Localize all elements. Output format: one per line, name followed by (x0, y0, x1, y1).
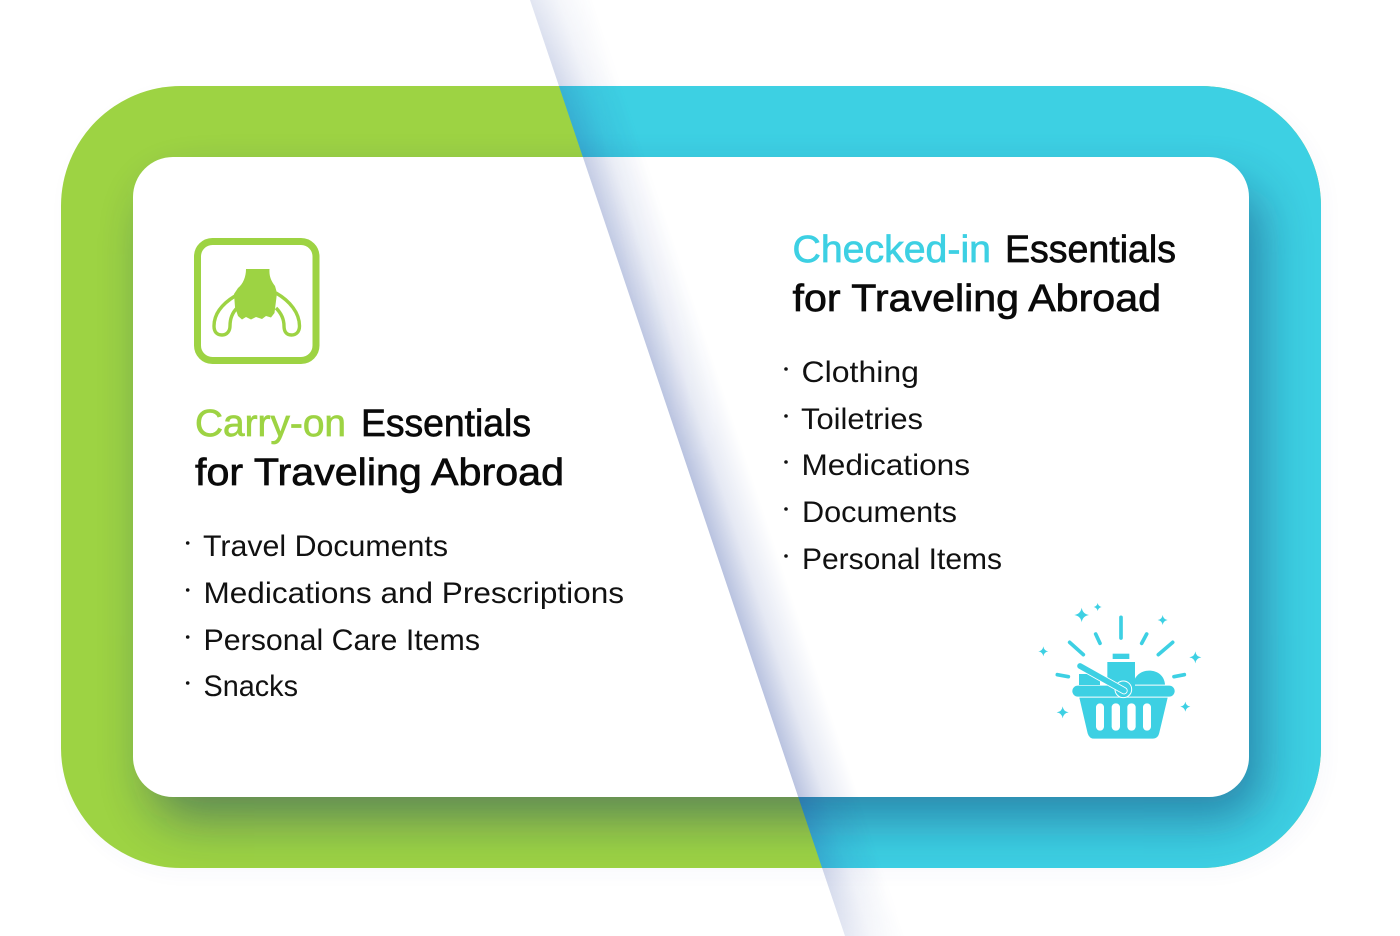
list: carry-on items (186, 530, 624, 703)
outer frame soft shadow (66, 92, 1326, 874)
panel: two-colour rounded frame (61, 86, 1321, 868)
heading: carry-on essentials (195, 403, 564, 494)
list: carry-on items: Travel Documents (203, 530, 448, 563)
list: carry-on items: Personal Care Items (204, 624, 480, 657)
diagonal fold shadow (530, 0, 879, 936)
list: checked-in items: Toiletries (801, 403, 923, 436)
heading: checked-in essentials: Essentials (1005, 229, 1176, 271)
blue checked-in half of frame (559, 86, 1321, 868)
heading: carry-on essentials: for Traveling Abroad (195, 452, 564, 494)
green carry-on half of frame (61, 86, 1321, 868)
list: checked-in items (784, 356, 1002, 576)
heading: checked-in essentials (792, 229, 1176, 320)
list: checked-in items: Documents (802, 496, 957, 529)
heading: checked-in essentials: Checked-in (792, 229, 991, 271)
frame inner shadow cast by card (150, 187, 1262, 819)
list: carry-on items: Snacks (204, 670, 298, 703)
panel: white card (133, 157, 1249, 797)
icon: sparkling basket (1038, 603, 1201, 739)
heading: carry-on essentials: Carry-on (195, 403, 346, 445)
list: checked-in items: Clothing (802, 356, 919, 389)
icon: hand holding bag handles (198, 242, 316, 360)
list: checked-in items: Personal Items (802, 543, 1002, 576)
heading: checked-in essentials: for Traveling Abroad (792, 278, 1161, 320)
list: carry-on items: Medications and Prescriptions (204, 577, 624, 610)
list: checked-in items: Medications (802, 449, 970, 482)
heading: carry-on essentials: Essentials (361, 403, 531, 445)
